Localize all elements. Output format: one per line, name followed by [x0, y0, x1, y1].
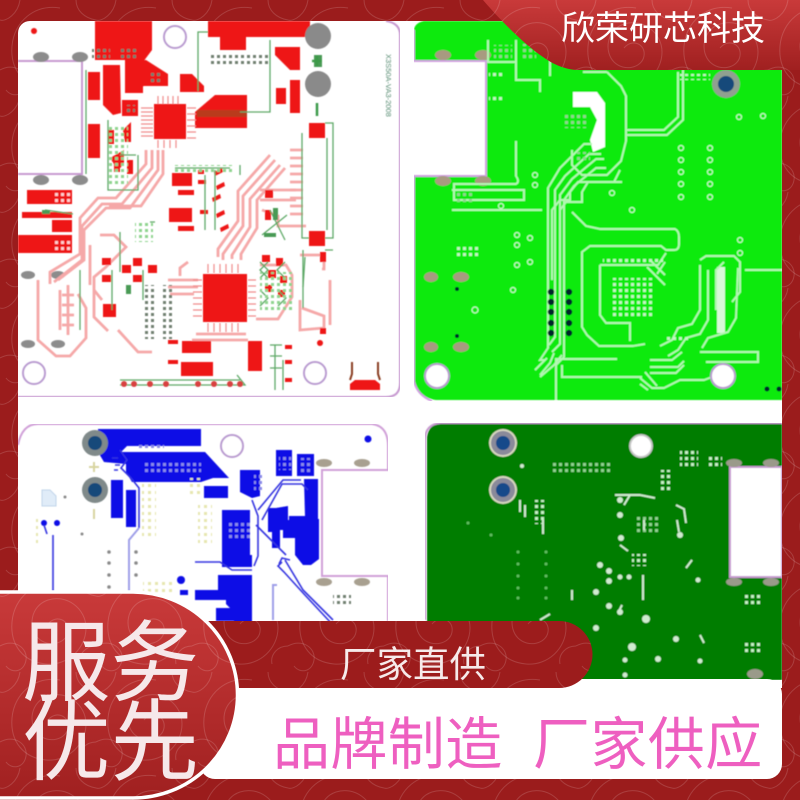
mounting hole: [630, 435, 652, 457]
small component rings: [472, 114, 766, 313]
board outline: [425, 423, 782, 620]
light traces: [452, 36, 782, 400]
blue pad grids: [136, 443, 311, 538]
panel: blue PCB layer: [18, 424, 388, 624]
white strip: [717, 267, 725, 333]
blue traces: [44, 450, 333, 624]
faint test points: [466, 522, 548, 600]
badge heading: 服务: [22, 614, 199, 713]
green silkscreen outlines: [45, 32, 333, 390]
board outline: [18, 21, 400, 397]
badge heading: 优先: [22, 693, 199, 792]
blue copper pours: [41, 429, 372, 622]
dark red band: [197, 110, 247, 117]
capacitors: [305, 23, 331, 97]
QFP pins: [141, 96, 256, 332]
pads: [424, 50, 491, 352]
white cut-out: [573, 92, 605, 152]
panel: bright green PCB layer: [414, 21, 782, 401]
green component marks: [42, 55, 322, 294]
connector cut-out: [730, 467, 782, 577]
light blue traces: [129, 528, 277, 620]
white bottom banner panel: [200, 679, 782, 779]
polarity marks: [89, 462, 99, 519]
slogan: brand manufacturing, factory supply: 厂家供应: [533, 713, 763, 777]
green pad grids: [455, 44, 710, 341]
capacitors: [489, 429, 517, 504]
white traces: [520, 495, 704, 659]
switch silhouette: [350, 362, 380, 380]
grey component grids: [92, 48, 292, 339]
pink traces: [38, 150, 330, 356]
panel: red PCB layer: [18, 21, 400, 397]
slogan: brand manufacturing, factory supply: 品牌制造: [273, 713, 503, 777]
green board fill: [414, 21, 782, 400]
silk labels in pale yellow: [32, 478, 212, 592]
pad grids: [534, 448, 762, 654]
pads: [726, 459, 779, 679]
mounting holes: [23, 26, 326, 384]
capacitors: [82, 430, 108, 503]
bottom header silkscreen: [121, 381, 243, 387]
notch outline: [414, 30, 486, 401]
pill: factory direct supply: [190, 621, 592, 688]
company name: 欣荣研芯科技: [561, 10, 765, 48]
mounting holes: [425, 364, 735, 388]
white image panel: [18, 21, 782, 688]
board version label: X3S50A-VA3-2008: [384, 54, 393, 117]
white component dots: [520, 464, 702, 678]
top-right ribbon with company name: [483, 0, 800, 70]
mounting hole: [221, 435, 243, 457]
test dots: [64, 496, 138, 589]
document icon: [42, 490, 56, 506]
polarity marks: [312, 56, 322, 116]
header pins: [455, 287, 782, 392]
dark green fill: [427, 424, 782, 680]
capacitor: [712, 70, 740, 98]
pads: [316, 459, 370, 586]
circular badge: service first: [0, 592, 238, 798]
red block details: [52, 70, 162, 252]
panel: dark green PCB layer: [425, 423, 782, 680]
board outline: [18, 424, 388, 621]
connector pads: [21, 52, 88, 348]
via grid: [610, 278, 652, 316]
connector pad grid: [333, 592, 351, 606]
red copper pours: [18, 21, 380, 390]
pill label: 厂家直供: [340, 644, 486, 685]
